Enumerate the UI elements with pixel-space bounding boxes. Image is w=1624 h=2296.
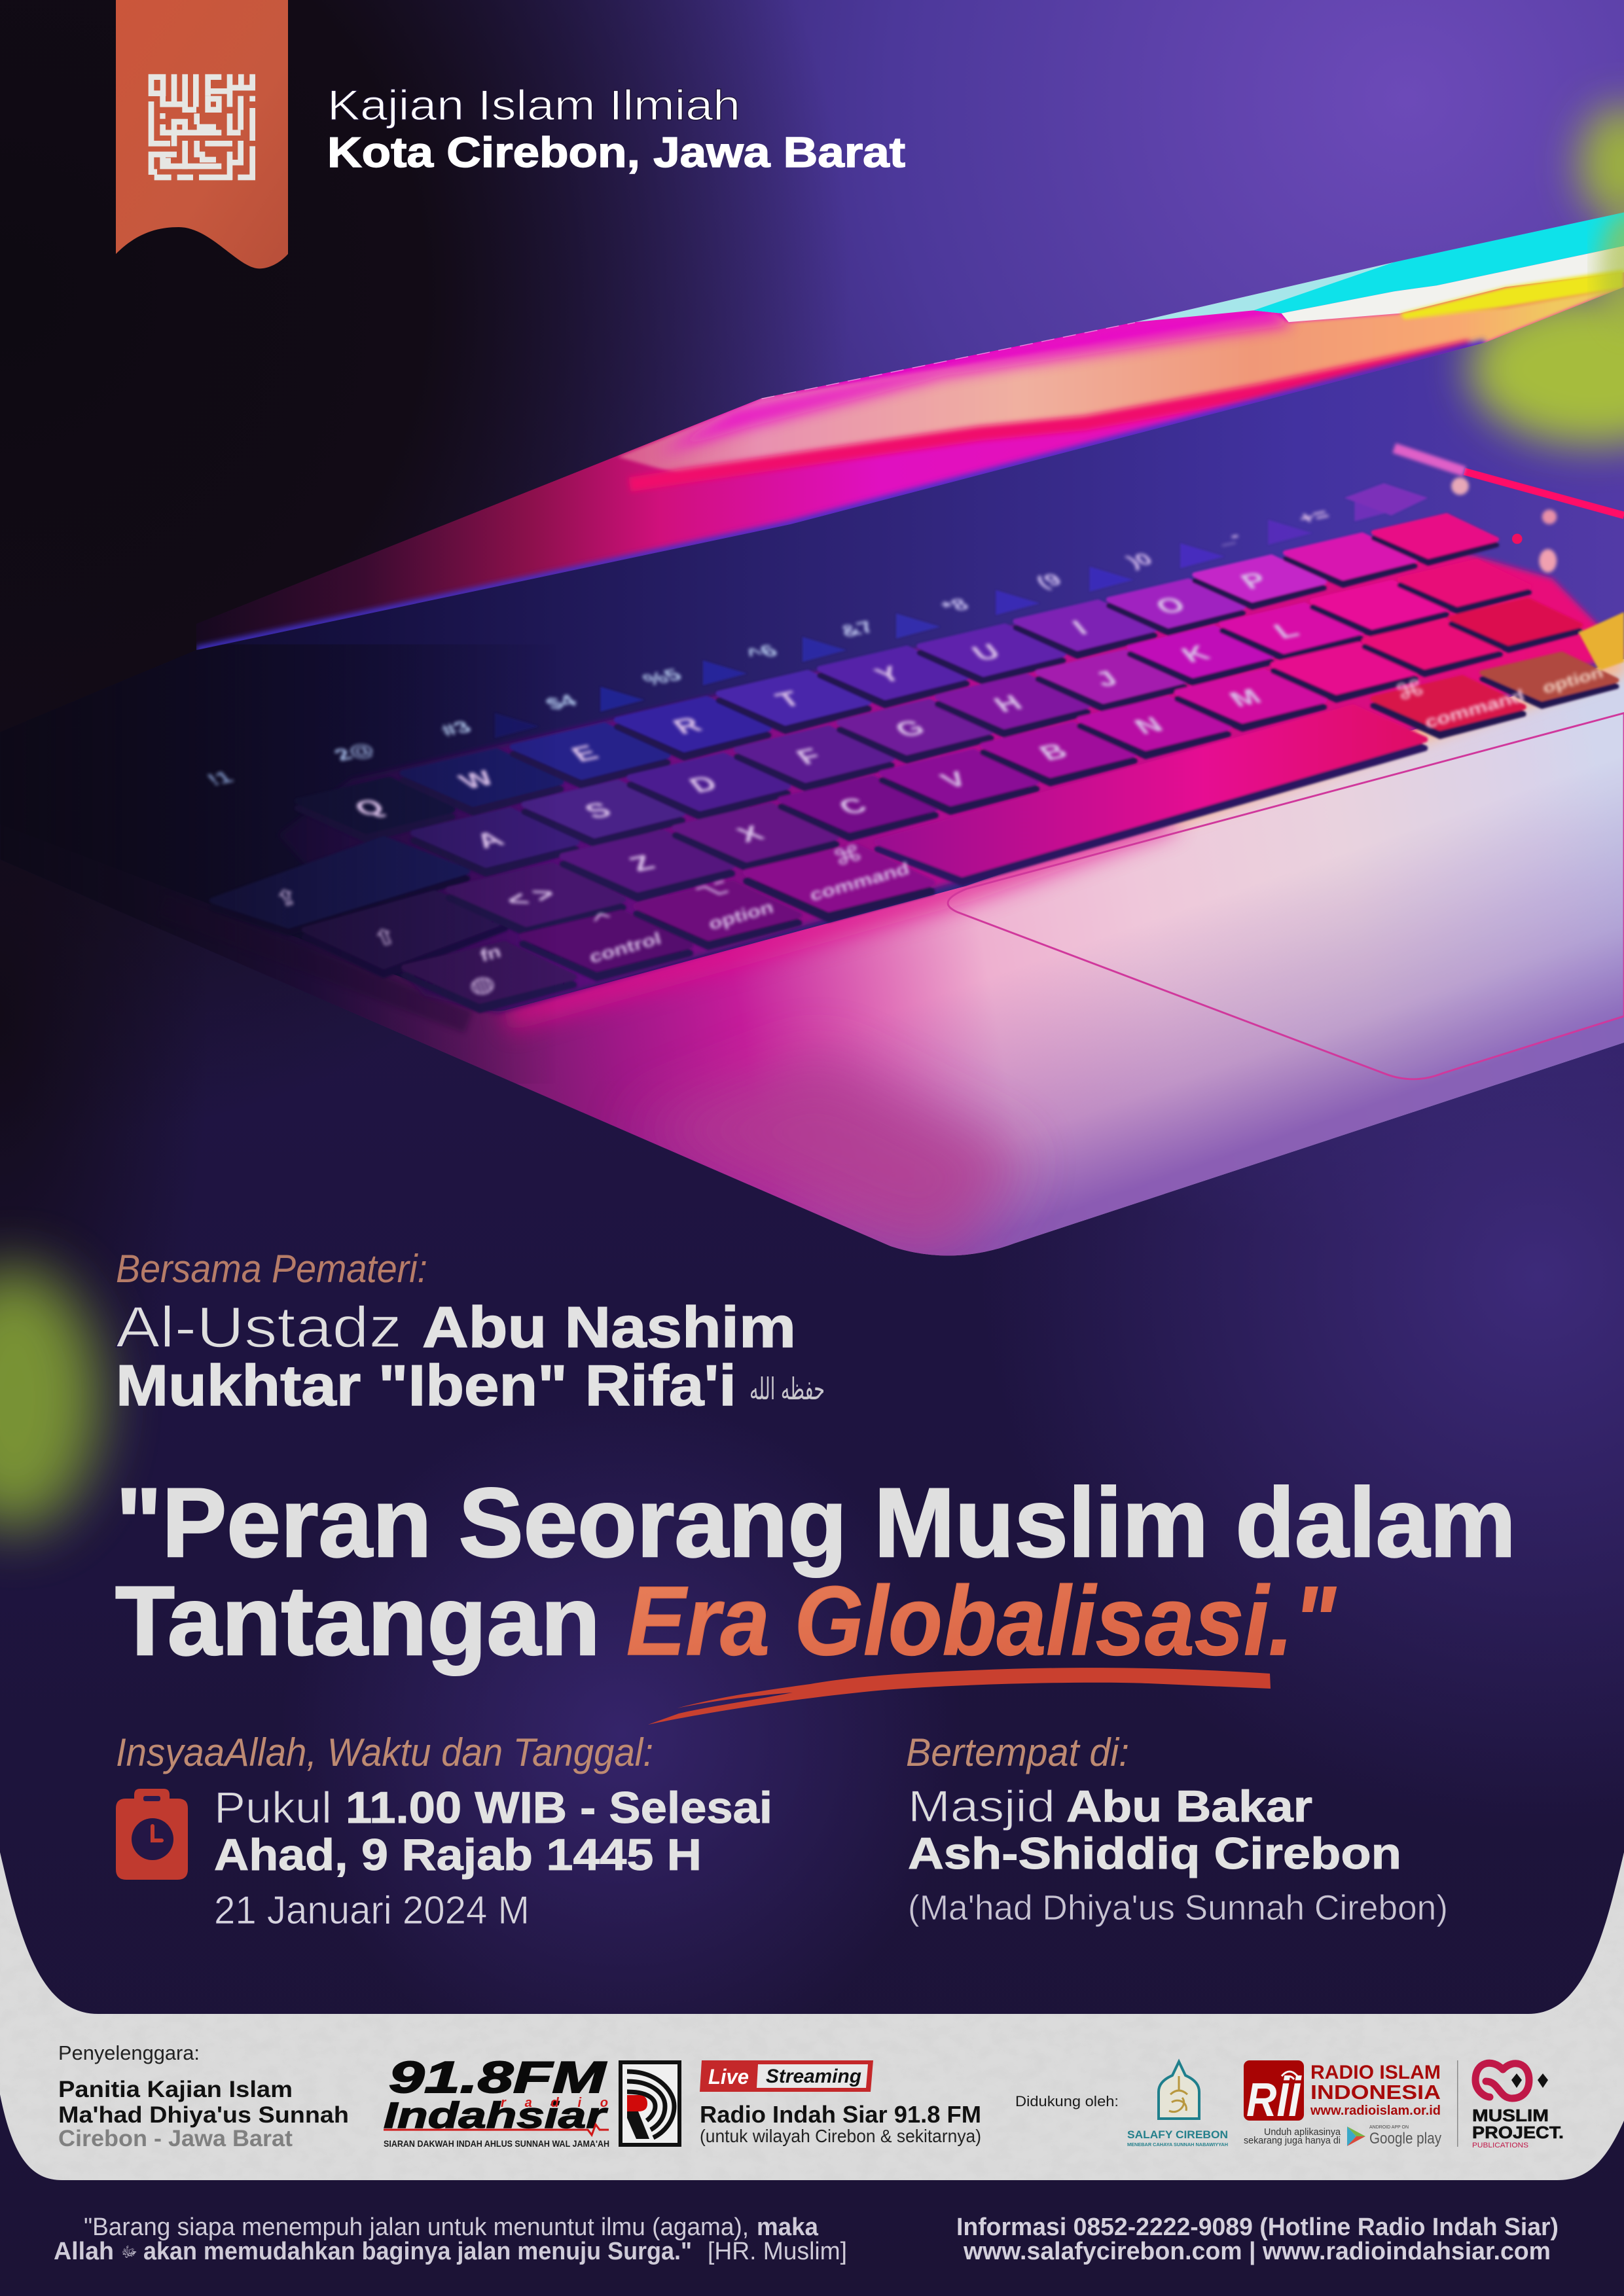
laptop photo <box>0 105 1624 1530</box>
header title: Kajian Islam Ilmiah <box>327 81 740 129</box>
logo: salafy cirebon <box>1127 2062 1228 2147</box>
logo: radio islam indonesia: INDONESIA <box>1310 2081 1441 2104</box>
laptop lid with reflected colours <box>196 212 1624 650</box>
main title <box>115 1467 1516 1676</box>
logo: radio indah siar: Indahsiar <box>384 2094 608 2136</box>
logo: salafy cirebon: MENEBAR CAHAYA SUNNAH NABAWIYYAH <box>1127 2143 1228 2147</box>
streaming text: (untuk wilayah Cirebon & sekitarnya) <box>700 2126 981 2146</box>
time and date block <box>116 1731 772 1932</box>
key labels: !1 <box>203 768 238 789</box>
ribbon <box>116 0 288 268</box>
key labels: P <box>1235 568 1273 594</box>
speaker block: Al-Ustadz <box>116 1295 402 1359</box>
logo: radio islam indonesia <box>1244 2060 1441 2147</box>
logo: radio islam indonesia: Unduh aplikasinya <box>1264 2126 1341 2138</box>
ribbon with kufic emblem <box>116 0 288 268</box>
key labels: Y <box>869 662 907 687</box>
header title: Kota Cirebon, Jawa Barat <box>327 128 905 176</box>
key labels: ⌥ <box>691 873 733 906</box>
footer paper panel <box>0 1852 1624 2180</box>
live streaming badge: Live <box>708 2065 749 2089</box>
logo: radio indah siar: 91.8FM <box>389 2053 607 2102</box>
logo: salafy cirebon: SALAFY CIREBON <box>1127 2128 1228 2141</box>
key labels: X <box>731 821 770 847</box>
key labels: C <box>833 793 873 819</box>
logo: radio islam indonesia: RADIO ISLAM <box>1310 2062 1441 2083</box>
key labels: J <box>1089 666 1124 692</box>
logo: radio indah siar <box>384 2053 679 2149</box>
green blur top right <box>1464 105 1624 439</box>
speaker block <box>116 1247 825 1418</box>
key labels: N <box>1128 713 1168 739</box>
bottom row keys <box>405 612 1624 1010</box>
time and date block: 11.00 WIB - Selesai <box>346 1783 772 1833</box>
key labels: K <box>1176 641 1216 667</box>
key labels: I <box>1067 616 1093 639</box>
logo: radio islam indonesia: ANDROID APP ON <box>1369 2125 1409 2130</box>
speaker block: Mukhtar "Iben" Rifa'i <box>116 1353 736 1418</box>
key labels: Q <box>349 795 391 821</box>
green blur left <box>0 1266 99 1530</box>
logo: radio islam indonesia: Rİİ <box>1246 2074 1303 2126</box>
live streaming badge: Streaming <box>766 2066 861 2087</box>
green haze over lid end <box>1599 209 1624 332</box>
red reflection stripe <box>1394 448 1624 573</box>
brush underline <box>648 1668 1271 1725</box>
key labels: S <box>579 798 617 823</box>
organiser text: Penyelenggara: <box>58 2041 200 2064</box>
key labels: ^ <box>586 906 620 937</box>
supported by label: Didukung oleh: <box>1015 2093 1119 2109</box>
key labels: A <box>470 827 510 853</box>
logo: muslim project: PROJECT. <box>1472 2123 1564 2142</box>
speaker block: Bersama Pemateri: <box>116 1247 427 1291</box>
contact information: www.salafycirebon.com | www.radioindahsiar.com <box>963 2238 1551 2265</box>
key labels: W <box>453 766 500 794</box>
key labels: Z <box>624 851 660 876</box>
contact information <box>956 2214 1559 2265</box>
main title: Era Globalisasi." <box>626 1566 1337 1676</box>
key labels: R <box>668 713 708 739</box>
venue block: Abu Bakar <box>1066 1782 1312 1831</box>
key labels: command <box>1423 686 1526 732</box>
key labels: _- <box>1210 527 1245 548</box>
organiser text: Panitia Kajian Islam <box>58 2077 293 2102</box>
logo: muslim project <box>1457 2060 1564 2149</box>
key labels: ⇧ <box>369 922 402 953</box>
key labels: option <box>707 897 776 934</box>
key labels: %5 <box>638 666 687 689</box>
hadith quote: [HR. Muslim] <box>708 2238 847 2265</box>
key labels: U <box>966 639 1006 666</box>
key labels: F <box>791 744 827 769</box>
hadith quote: maka <box>757 2214 819 2241</box>
icon: google play triangle <box>1347 2126 1365 2146</box>
key labels: < > <box>499 882 562 912</box>
key labels: += <box>1293 505 1335 528</box>
key labels: T <box>770 687 807 712</box>
key labels: B <box>1034 739 1074 765</box>
key labels: ⇪ <box>270 883 304 914</box>
hadith quote: akan memudahkan baginya jalan menuju Surga." <box>143 2238 692 2265</box>
key labels: G <box>889 715 931 742</box>
key labels: ◍ <box>465 969 499 1000</box>
key labels: ^6 <box>742 641 782 664</box>
main title: Tantangan <box>115 1566 600 1676</box>
icon: square kufic calligraphy <box>149 74 255 180</box>
palm rest <box>208 658 1624 1255</box>
key labels <box>203 505 1605 1000</box>
key labels: option <box>1541 663 1605 697</box>
logo: radio islam indonesia: www.radioislam.or.id <box>1310 2104 1441 2118</box>
keyboard well <box>278 536 1624 1013</box>
key labels: H <box>988 691 1028 717</box>
key labels: 2@ <box>330 740 380 764</box>
hadith quote <box>54 2214 847 2265</box>
laptop base deck <box>0 287 1624 1255</box>
key labels: L <box>1268 618 1305 643</box>
key labels: E <box>566 741 604 766</box>
key labels: control <box>588 929 663 967</box>
logo: radio indah siar: radio <box>501 2096 608 2110</box>
logo: muslim project: PUBLICATIONS <box>1472 2142 1528 2149</box>
logo: radio islam indonesia: Google play <box>1369 2130 1441 2147</box>
venue block <box>906 1731 1448 1928</box>
key labels: V <box>935 767 973 793</box>
time and date block: Pukul <box>214 1783 332 1833</box>
green glow over deck edge <box>1469 293 1624 445</box>
logo: radio indah siar: SIARAN DAKWAH INDAH AHLUS SUNNAH WAL JAMA'AH <box>384 2138 609 2149</box>
venue block: Bertempat di: <box>906 1731 1129 1774</box>
key labels: O <box>1150 592 1191 619</box>
streaming text <box>700 2101 981 2146</box>
organiser text: Cirebon - Jawa Barat <box>58 2126 293 2151</box>
venue block: (Ma'had Dhiya'us Sunnah Cirebon) <box>908 1888 1448 1928</box>
organiser text <box>58 2041 349 2151</box>
key labels: ⌘ <box>829 840 867 872</box>
key labels: #3 <box>436 718 476 740</box>
key labels: (9 <box>1032 571 1066 592</box>
time and date block: 21 Januari 2024 M <box>214 1888 530 1932</box>
venue block: Masjid <box>908 1782 1055 1831</box>
hadith quote: ﷻ <box>121 2244 137 2261</box>
row Z keys <box>304 600 1581 975</box>
trackpad <box>948 713 1624 1079</box>
time and date block: InsyaaAllah, Waktu dan Tanggal: <box>116 1731 653 1774</box>
contact information: Informasi 0852-2222-9089 (Hotline Radio Indah Siar) <box>956 2214 1559 2241</box>
logo: muslim project: MUSLIM <box>1472 2106 1549 2125</box>
keyboard <box>212 483 1624 1010</box>
speaker block: Abu Nashim <box>422 1295 796 1359</box>
number row keys <box>495 483 1428 738</box>
key labels: command <box>808 859 911 905</box>
key labels: &7 <box>835 618 879 641</box>
key labels: $4 <box>541 692 582 713</box>
icon: clock bag <box>116 1789 188 1880</box>
key labels: ⌘ <box>1391 674 1430 706</box>
hadith quote: Allah <box>54 2238 114 2265</box>
venue block: Ash-Shiddiq Cirebon <box>908 1829 1401 1878</box>
streaming text: Radio Indah Siar 91.8 FM <box>700 2101 981 2128</box>
left shadow over keyboard <box>0 644 556 1084</box>
live streaming badge <box>700 2060 873 2092</box>
key labels: *8 <box>937 596 973 617</box>
logo: radio islam indonesia: sekarang juga hanya di <box>1244 2135 1341 2146</box>
key labels: fn <box>478 942 503 966</box>
main title: "Peran Seorang Muslim dalam <box>116 1467 1516 1577</box>
key labels: D <box>683 772 723 797</box>
speaker block: حفظه الله <box>749 1371 825 1407</box>
row A keys <box>212 561 1529 933</box>
header title <box>327 81 905 176</box>
key labels: )0 <box>1123 550 1157 571</box>
row Q keys <box>297 515 1497 840</box>
icon: R logo <box>621 2062 679 2145</box>
organiser text: Ma'had Dhiya'us Sunnah <box>58 2102 349 2128</box>
hadith quote: "Barang siapa menempuh jalan untuk menuntut ilmu (agama), <box>84 2214 749 2241</box>
time and date block: Ahad, 9 Rajab 1445 H <box>214 1830 702 1880</box>
key labels: M <box>1224 685 1267 711</box>
